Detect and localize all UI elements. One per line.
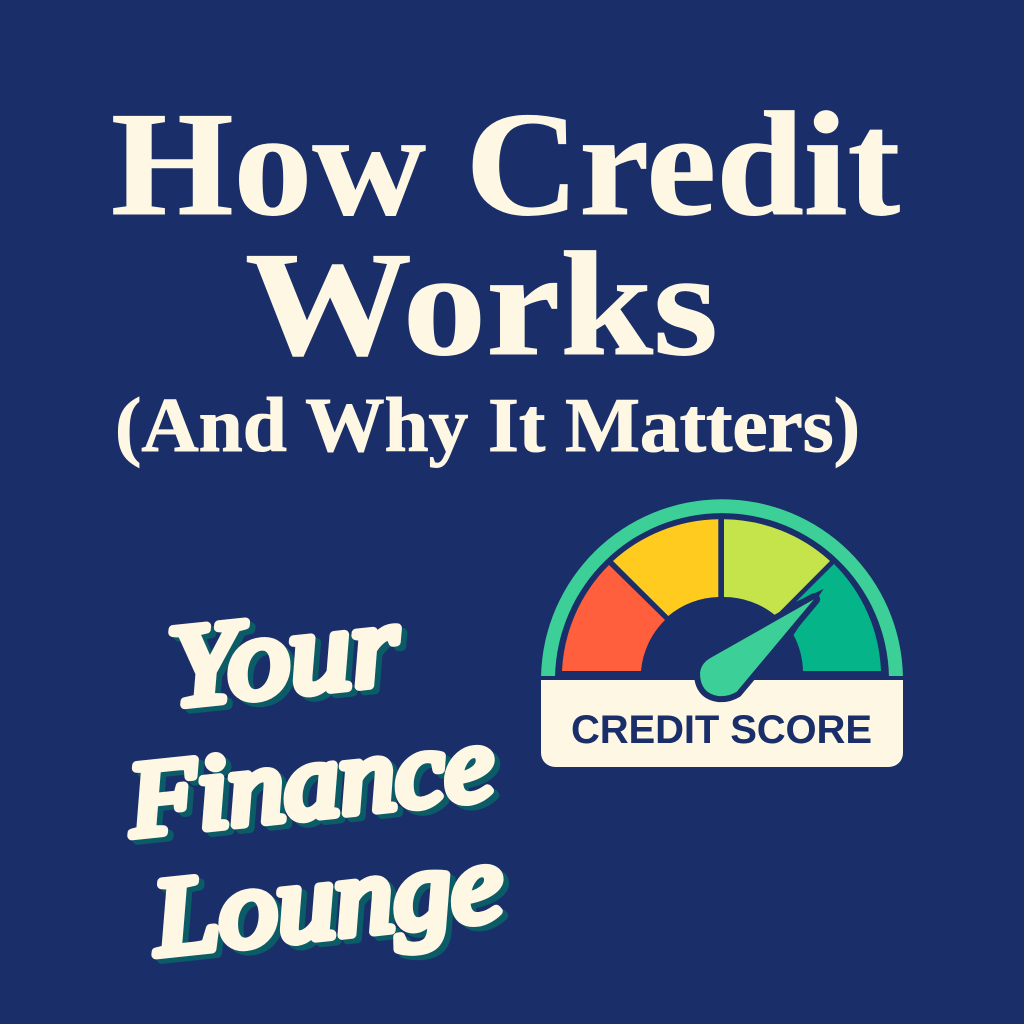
credit score gauge (541, 499, 903, 767)
gauge segment: red (562, 565, 665, 671)
brand word: Your: Your (168, 585, 411, 736)
title (111, 82, 900, 468)
title line 2: Works (245, 222, 718, 387)
score label panel (541, 680, 903, 767)
gauge needle (700, 599, 814, 696)
gauge segment: yellow (613, 519, 718, 616)
brand word: Finance: Finance (122, 704, 499, 859)
brand word: Lounge: Lounge (145, 821, 508, 979)
brand word: Finance: Finance (127, 708, 505, 863)
panel label: credit score: CREDIT SCORE (571, 708, 872, 752)
gauge segment: green (794, 564, 881, 671)
title line 1: How Credit (111, 82, 900, 247)
brand word: Your: Your (163, 580, 406, 732)
gauge outer arc band (541, 499, 903, 676)
brand word: Lounge: Lounge (151, 825, 514, 983)
gauge segment: lime (724, 519, 830, 616)
brand script lettering (122, 580, 514, 984)
subtitle: (And Why It Matters) (115, 382, 860, 468)
